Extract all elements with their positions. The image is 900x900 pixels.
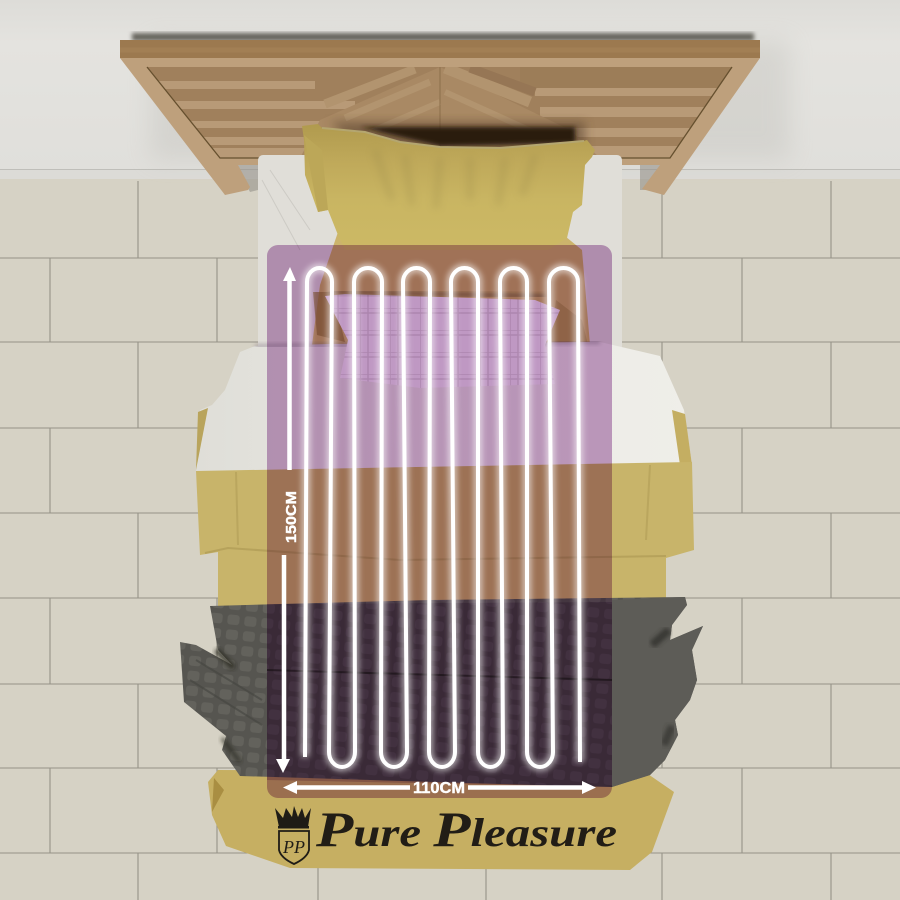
small front pillow (325, 292, 560, 388)
white duvet fold (196, 342, 692, 472)
wall and skirting (0, 0, 900, 179)
mattress (258, 155, 622, 365)
headboard frame and legs (120, 58, 760, 195)
brand name: Pure Pleasure (315, 801, 617, 857)
shield icon: PP (282, 837, 305, 857)
height arrow 150CM: 150CM (283, 491, 300, 543)
top yellow pillow (302, 124, 595, 250)
back yellow pillow (312, 232, 590, 345)
width arrow 110CM (283, 780, 596, 797)
top rail (120, 40, 760, 58)
yellow duvet (196, 408, 694, 610)
headboard panel (148, 67, 731, 155)
purple size overlay (267, 245, 612, 798)
foot of duvet (208, 770, 674, 870)
headboard (120, 33, 790, 195)
width arrow 110CM: 110CM (413, 780, 465, 797)
brand logo (275, 801, 617, 864)
shadow above pillow (330, 122, 585, 150)
shield icon (279, 831, 309, 864)
overlay darkening on throw (267, 602, 612, 787)
crown icon (275, 806, 311, 828)
neon zigzag heating wire (305, 268, 580, 767)
leg shadows (236, 165, 258, 192)
height arrow 150CM (276, 267, 300, 773)
grey waffle throw (180, 597, 703, 787)
